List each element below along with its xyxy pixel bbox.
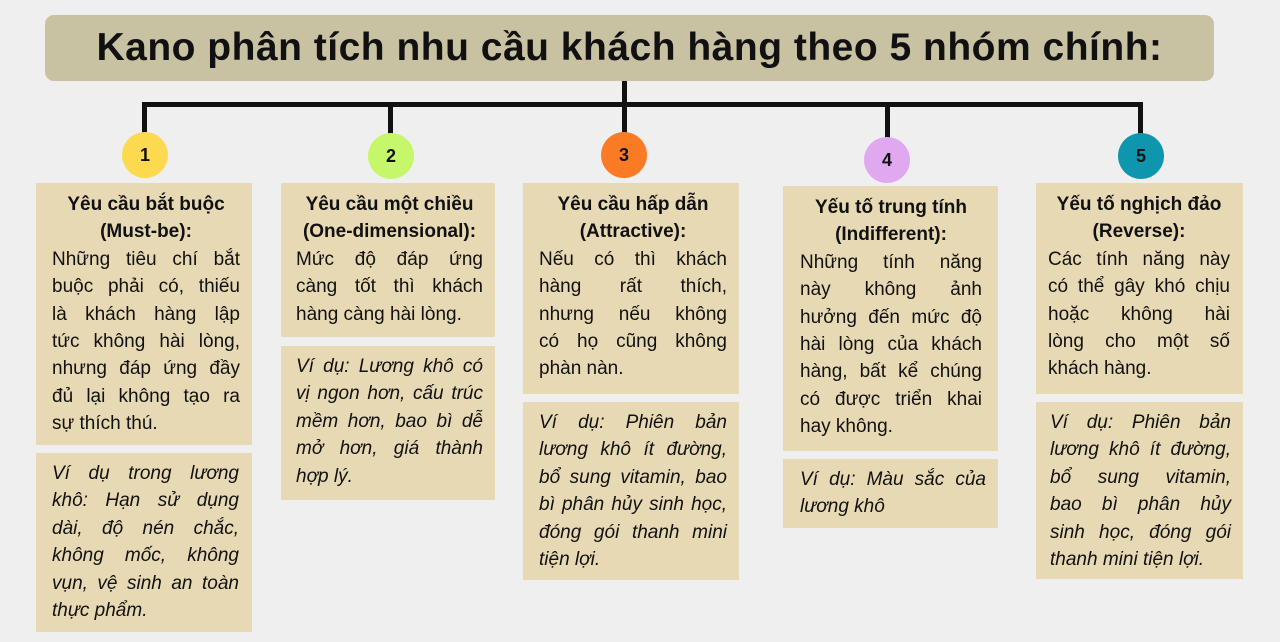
panel 1: must-be: nhưng đáp ứng đầy <box>52 358 240 379</box>
example 5: thanh mini tiện lợi. <box>1050 549 1204 570</box>
circle 5 <box>1118 133 1164 179</box>
example 4: Ví dụ: Màu sắc của <box>800 469 986 490</box>
panel 3: attractive: phàn nàn. <box>539 358 624 379</box>
title: Kano phân tích nhu cầu khách hàng theo 5 nhóm chính: <box>96 26 1163 69</box>
panel 1: must-be: sự thích thú. <box>52 413 158 434</box>
example 2: Ví dụ: Lương khô có <box>296 356 483 377</box>
example 1: Ví dụ trong lương <box>52 463 239 484</box>
panel 5: reverse: Các tính năng này <box>1048 249 1230 270</box>
example 1: vụn, vệ sinh an toàn <box>52 573 239 594</box>
example 4 <box>783 459 998 528</box>
panel 1: must-be: tức không hài lòng, <box>52 331 240 352</box>
panel 2: one-dimensional: Mức độ đáp ứng <box>296 249 483 270</box>
example 1: khô: Hạn sử dụng <box>52 490 239 511</box>
panel 2: one-dimensional: hàng càng hài lòng. <box>296 304 462 325</box>
panel 2: one-dimensional: Yêu cầu một chiều <box>306 194 473 215</box>
example 3: Ví dụ: Phiên bản <box>539 412 727 433</box>
example 3: lương khô ít đường, <box>539 439 727 460</box>
title <box>45 15 1214 81</box>
panel 1: must-be: Yêu cầu bắt buộc <box>67 194 225 215</box>
example 5: sinh học, đóng gói <box>1050 522 1231 543</box>
example 3: tiện lợi. <box>539 549 600 570</box>
panel 3: attractive: Nếu có thì khách <box>539 249 727 270</box>
panel 4: indifferent: Yếu tố trung tính <box>815 197 967 218</box>
example 5: lương khô ít đường, <box>1050 439 1231 460</box>
panel 2: one-dimensional: (One-dimensional): <box>303 221 476 242</box>
panel 1: must-be: buộc phải có, thiếu <box>52 276 240 297</box>
panel 5: reverse: (Reverse): <box>1093 221 1185 242</box>
example 1: dài, độ nén chắc, <box>52 518 239 539</box>
panel 1: must-be: là khách hàng lập <box>52 304 240 325</box>
panel 4: indifferent <box>783 186 998 451</box>
circle 1: 1 <box>140 145 150 165</box>
panel 5: reverse: lòng cho một số <box>1048 331 1230 352</box>
circle 4: 4 <box>882 150 892 170</box>
panel 4: indifferent: hài lòng của khách <box>800 334 982 355</box>
example 1: không mốc, không <box>52 545 239 566</box>
panel 2: one-dimensional <box>281 183 495 337</box>
example 5 <box>1036 402 1243 579</box>
panel 3: attractive <box>523 183 739 394</box>
panel 5: reverse: Yếu tố nghịch đảo <box>1057 194 1221 215</box>
circle 4 <box>864 137 910 183</box>
example 2: mở hơn, giá thành <box>296 438 483 459</box>
example 5: Ví dụ: Phiên bản <box>1050 412 1231 433</box>
panel 5: reverse: hoặc không hài <box>1048 304 1230 325</box>
panel 1: must-be: (Must-be): <box>100 221 192 242</box>
example 2 <box>281 346 495 500</box>
circle 2: 2 <box>386 146 396 166</box>
panel 4: indifferent: Những tính năng <box>800 252 982 273</box>
panel 3: attractive: hàng rất thích, <box>539 276 727 297</box>
panel 5: reverse: có thể gây khó chịu <box>1048 276 1230 297</box>
panel 4: indifferent: (Indifferent): <box>835 224 947 245</box>
panel 4: indifferent: này không ảnh <box>800 279 982 300</box>
panel 4: indifferent: có được triển khai <box>800 389 982 410</box>
circle 5: 5 <box>1136 146 1146 166</box>
example 4: lương khô <box>800 496 885 517</box>
example 2: vị ngon hơn, cấu trúc <box>296 383 483 404</box>
example 3 <box>523 402 739 580</box>
panel 4: indifferent: hưởng đến mức độ <box>800 307 982 328</box>
example 1 <box>36 453 252 632</box>
panel 4: indifferent: hay không. <box>800 416 893 437</box>
panel 1: must-be <box>36 183 252 445</box>
panel 3: attractive: Yêu cầu hấp dẫn <box>558 194 708 215</box>
example 3: đóng gói thanh mini <box>539 522 727 543</box>
panel 1: must-be: Những tiêu chí bắt <box>52 249 240 270</box>
panel 3: attractive: nhưng nếu không <box>539 304 727 325</box>
example 3: bổ sung vitamin, bao <box>539 467 727 488</box>
circle 2 <box>368 133 414 179</box>
panel 2: one-dimensional: càng tốt thì khách <box>296 276 483 297</box>
example 3: bì phân hủy sinh học, <box>539 494 727 515</box>
circle 3: 3 <box>619 145 629 165</box>
panel 5: reverse: khách hàng. <box>1048 358 1152 379</box>
panel 4: indifferent: hàng, bất kể chúng <box>800 361 982 382</box>
circle 1 <box>122 132 168 178</box>
panel 1: must-be: đủ lại không tạo ra <box>52 386 240 407</box>
example 5: bao bì phân hủy <box>1050 494 1231 515</box>
example 2: mềm hơn, bao bì dễ <box>296 411 483 432</box>
panel 3: attractive: (Attractive): <box>580 221 686 242</box>
circle 3 <box>601 132 647 178</box>
connector tree <box>142 81 1143 138</box>
example 2: hợp lý. <box>296 466 353 487</box>
panel 3: attractive: có họ cũng không <box>539 331 727 352</box>
example 5: bổ sung vitamin, <box>1050 467 1231 488</box>
panel 5: reverse <box>1036 183 1243 394</box>
example 1: thực phẩm. <box>52 600 147 621</box>
